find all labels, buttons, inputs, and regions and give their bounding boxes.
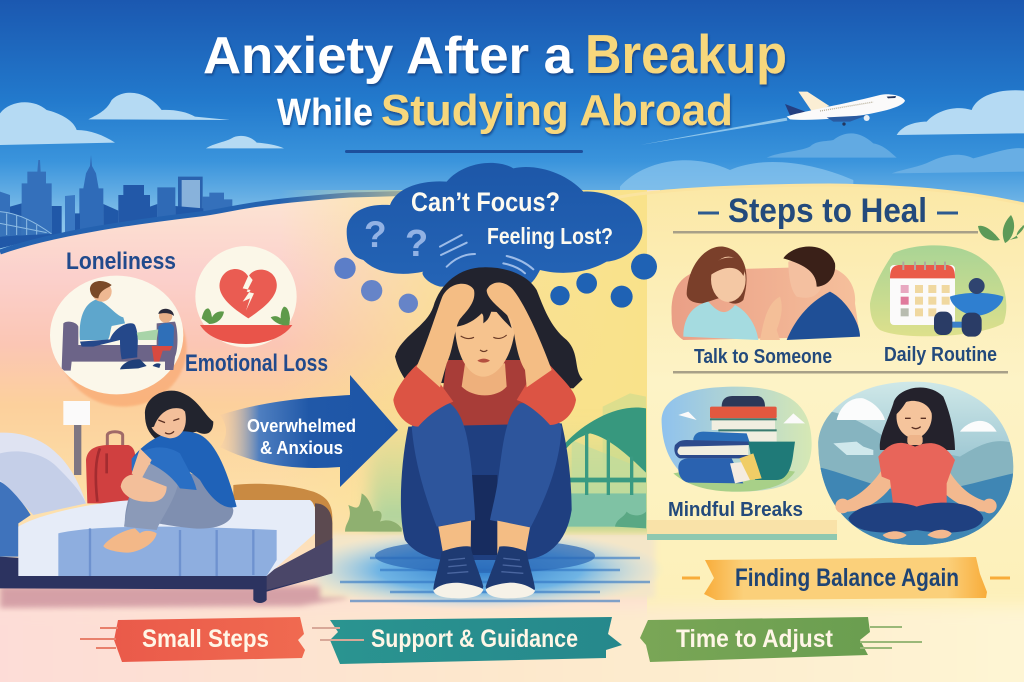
question marks: ? xyxy=(364,214,387,255)
title underline xyxy=(345,150,583,153)
bed frame xyxy=(0,540,332,603)
face xyxy=(896,401,932,438)
cloud text: Can’t Focus? xyxy=(411,187,560,217)
background clouds: left xyxy=(0,93,284,148)
floor pink shadow xyxy=(0,586,346,608)
card: daily routine xyxy=(870,245,1006,366)
label: Loneliness: Loneliness xyxy=(66,248,176,275)
banner: support and guidance xyxy=(312,617,622,664)
hair xyxy=(145,391,213,440)
father figure xyxy=(80,281,147,369)
title: While xyxy=(277,92,373,134)
bed scene xyxy=(0,391,332,603)
thought bubble: ? xyxy=(405,223,428,265)
background: centre wash xyxy=(280,190,647,535)
vignette: loneliness xyxy=(50,276,187,407)
background: bottom xyxy=(0,606,1024,682)
sweater xyxy=(133,431,237,507)
card: talk to someone: Talk to Someone xyxy=(694,346,832,368)
banner: finding balance xyxy=(704,557,987,600)
child figure xyxy=(137,309,174,368)
mattress xyxy=(18,500,315,576)
banner: time to adjust xyxy=(640,617,922,662)
ankles xyxy=(438,521,530,555)
title: Breakup xyxy=(585,23,787,85)
right leg xyxy=(490,403,562,528)
card: mindful breaks xyxy=(662,387,812,521)
card: mindful breaks: Mindful Breaks xyxy=(668,499,803,521)
bangs xyxy=(457,290,512,328)
banner: support and guidance: Support & Guidance xyxy=(371,625,578,653)
background: sky xyxy=(0,0,1024,260)
facial features xyxy=(461,335,507,351)
feet xyxy=(103,528,157,553)
back of legs xyxy=(401,423,572,560)
right panel lower strip xyxy=(647,520,837,540)
central figure xyxy=(393,267,583,598)
face xyxy=(455,312,515,377)
card: daily routine: Daily Routine xyxy=(884,344,997,366)
vignette: broken heart xyxy=(195,246,297,347)
divider xyxy=(673,371,1008,374)
arrow: overwhelmed: & Anxious xyxy=(260,438,343,458)
card: meditating woman xyxy=(817,382,1013,547)
arrow: overwhelmed: Overwhelmed xyxy=(247,416,356,436)
suitcase xyxy=(86,432,135,503)
hair back xyxy=(395,267,583,388)
card: talk to someone xyxy=(671,246,860,368)
crossed legs xyxy=(848,503,983,533)
neck xyxy=(462,363,507,395)
banner: finding balance: Finding Balance Again xyxy=(735,564,959,592)
background: left hill xyxy=(0,190,660,620)
banner dashes xyxy=(682,576,1010,580)
heading: steps to heal: Steps to Heal xyxy=(728,192,927,230)
left leg xyxy=(412,403,475,527)
lamp xyxy=(63,401,90,475)
forearms and hands xyxy=(417,284,474,387)
background: centre green ground xyxy=(370,420,660,530)
background clouds: right xyxy=(620,90,1024,193)
hands xyxy=(121,475,167,502)
jeans xyxy=(125,459,233,529)
banner: time to adjust: Time to Adjust xyxy=(676,625,834,653)
thought bubble puffs xyxy=(334,254,657,313)
face xyxy=(150,404,186,438)
city skyline xyxy=(0,155,232,248)
title: Anxiety After a xyxy=(203,27,574,85)
sitting woman xyxy=(103,391,237,553)
bed headboard xyxy=(233,484,332,540)
heading: steps to heal xyxy=(673,192,1024,243)
arrow: overwhelmed xyxy=(220,375,398,487)
pillow left xyxy=(0,433,86,513)
sleeves xyxy=(393,363,453,427)
water xyxy=(295,530,665,610)
thought bubble xyxy=(347,163,642,288)
banner: small steps xyxy=(80,617,305,662)
feet xyxy=(883,530,952,539)
ground tan band xyxy=(320,534,655,598)
arms xyxy=(843,470,988,512)
stacked books xyxy=(674,396,795,483)
right panel top strip xyxy=(610,185,1024,204)
hair xyxy=(880,387,955,450)
title xyxy=(203,23,787,135)
airplane xyxy=(640,92,905,145)
background: right panel xyxy=(647,185,1024,620)
banner: small steps: Small Steps xyxy=(142,625,269,653)
torso xyxy=(440,360,537,475)
label: Emotional Loss: Emotional Loss xyxy=(185,350,328,377)
woman xyxy=(683,247,758,340)
thought bubble: Feeling Lost? xyxy=(487,223,613,249)
man xyxy=(783,246,860,340)
top xyxy=(878,443,955,507)
scenery: bridge and shrubs xyxy=(345,393,646,532)
title: Studying Abroad xyxy=(381,86,733,135)
shoes xyxy=(433,546,483,597)
